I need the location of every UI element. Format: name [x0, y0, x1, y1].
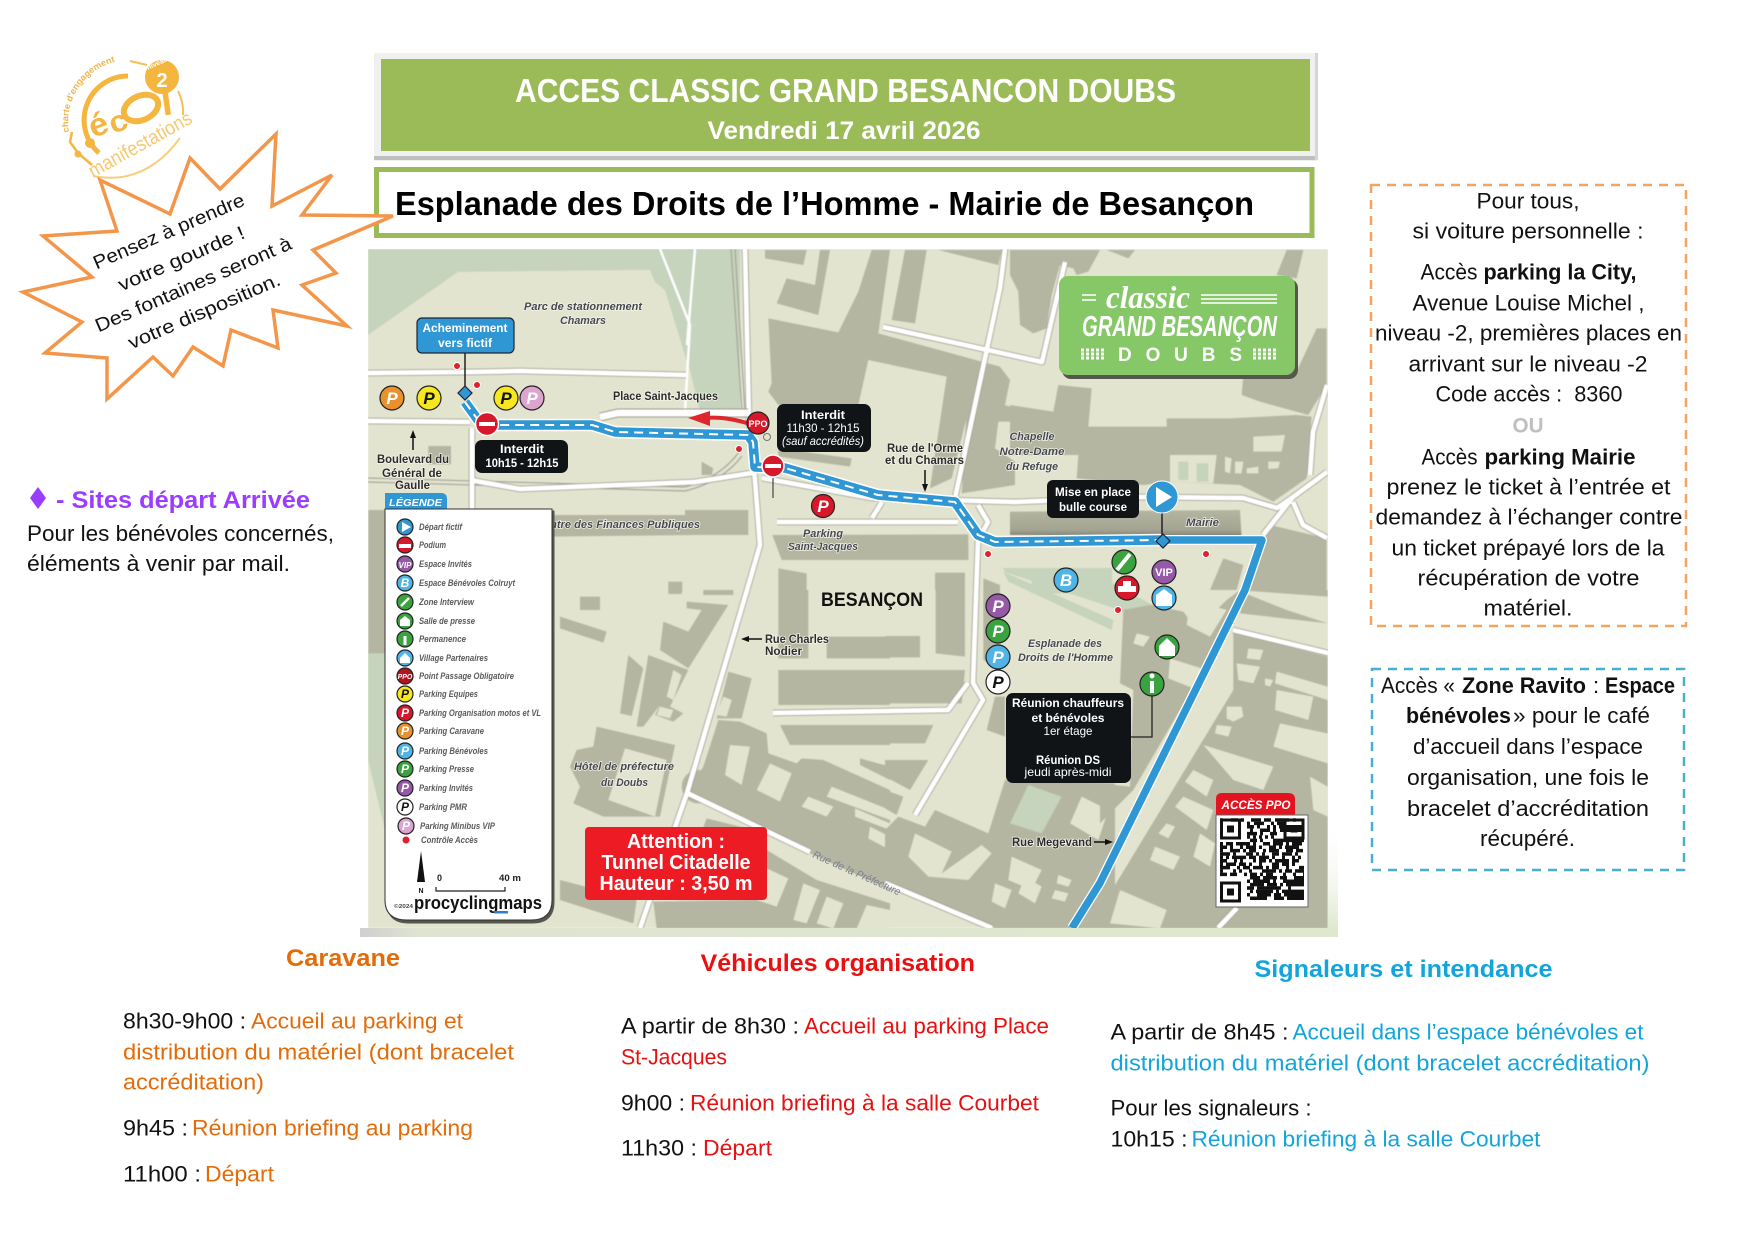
panel: car access: Pour tous,: [1476, 188, 1580, 214]
legend panel: Podium: [419, 540, 446, 551]
panel: caravane schedule: Caravane: [286, 945, 400, 972]
map labels: Parking: [803, 528, 843, 540]
panel: signaleurs schedule: Signaleurs et intendance: [1254, 956, 1552, 983]
attention callout: Tunnel Citadelle: [602, 852, 750, 874]
map labels: Gaulle: [395, 478, 430, 492]
attention callout: Attention :: [627, 831, 725, 853]
legend panel: P: [401, 762, 410, 776]
map panel: [360, 249, 1338, 937]
legend panel: ©2024: [394, 903, 413, 910]
panel: caravane schedule: distribution du matériel (dont bracelet: [123, 1040, 514, 1064]
interdit label 1: 10h15 - 12h15: [486, 456, 559, 470]
panel: ravito access: d’accueil dans l’espace: [1413, 734, 1643, 759]
panel: ravito access: bénévoles: [1406, 703, 1511, 728]
location heading: [376, 170, 1312, 236]
panel: caravane schedule: [123, 945, 514, 1186]
eco-manifestations logo: c: [104, 103, 132, 141]
panel: car access: niveau -2, premières places en: [1375, 320, 1682, 346]
panel: ravito access: Accès «: [1381, 673, 1455, 698]
title banner: [374, 53, 1318, 161]
panel: signaleurs schedule: Accueil dans l’espace bénévoles et: [1292, 1020, 1644, 1044]
starburst callout: Des fontaines seront à: [92, 233, 295, 337]
blue acheminement label: [417, 318, 514, 400]
panel: caravane schedule: 8h30-9h00 :: [123, 1008, 246, 1034]
map panel: P: [992, 673, 1004, 692]
map panel: P: [526, 389, 538, 408]
map labels: [377, 301, 1219, 898]
panel: ravito access: organisation, une fois le: [1407, 765, 1649, 790]
map labels: Général de: [382, 466, 442, 480]
panel: car access: Code accès : 8360: [1436, 382, 1622, 406]
access control dots: [454, 362, 1210, 614]
legend panel: 40 m: [499, 873, 521, 883]
reunion label: [1006, 693, 1152, 783]
map labels: Rue Megevand: [1012, 835, 1092, 849]
map panel: VIP: [1155, 567, 1173, 579]
legend panel: 0: [437, 873, 442, 883]
map markers: [380, 386, 1179, 696]
map labels: BESANÇON: [821, 590, 923, 611]
map labels: Notre-Dame: [1000, 446, 1064, 458]
classic logo plate: GRAND BESANÇON: [1082, 311, 1278, 343]
legend panel: P: [401, 706, 410, 720]
interdit label 2: 11h30 - 12h15: [786, 421, 860, 435]
legend panel: Zone Interview: [418, 597, 475, 608]
panel: car access: si voiture personnelle :: [1412, 218, 1644, 244]
map labels: Chapelle: [1010, 431, 1054, 443]
map panel: PPO: [748, 419, 768, 429]
legend panel: Parking Presse: [419, 764, 475, 775]
map labels: Nodier: [765, 644, 802, 658]
legend panel: Parking Bénévoles: [419, 746, 488, 757]
sites note: [27, 487, 334, 576]
map panel: P: [817, 497, 829, 516]
legend panel: P: [401, 687, 410, 701]
park and green areas: [368, 249, 1180, 833]
map labels: Rue de la Préfecture: [811, 849, 903, 898]
no-entry signs: [476, 412, 784, 498]
panel: car access: demandez à l’échanger contre: [1376, 504, 1682, 530]
buildings south centre: [885, 545, 1115, 928]
legend panel: B: [401, 576, 410, 590]
title banner: Vendredi 17 avril 2026: [708, 117, 980, 145]
panel: car access: Avenue Louise Michel ,: [1412, 290, 1644, 316]
panel: vehicules schedule: Départ: [703, 1136, 772, 1160]
panel: ravito access: :: [1593, 673, 1599, 698]
map panel: P: [992, 622, 1004, 641]
buildings east: [1100, 590, 1328, 928]
blue acheminement label: vers fictif: [438, 336, 493, 350]
legend panel: P: [401, 781, 410, 795]
rail lines: [368, 249, 745, 491]
legend panel: LÉGENDE: [389, 496, 443, 509]
panel: car access: arrivant sur le niveau -2: [1408, 352, 1648, 376]
eco-manifestations logo: [62, 56, 196, 182]
panel: vehicules schedule: 11h30 :: [621, 1136, 697, 1160]
panel: vehicules schedule: Accueil au parking Place: [804, 1014, 1049, 1038]
panel: vehicules schedule: A partir de 8h30 :: [621, 1014, 799, 1038]
reunion label: Réunion DS: [1036, 753, 1100, 767]
map panel: P: [386, 389, 398, 408]
legend panel: P: [401, 724, 410, 738]
map labels: Mairie: [1186, 517, 1219, 529]
roads: [368, 249, 1328, 928]
eco-manifestations logo: 2: [156, 70, 168, 92]
legend panel: Parking PMR: [419, 802, 467, 813]
panel: vehicules schedule: Véhicules organisation: [700, 950, 975, 977]
panel: ravito access: » pour le café: [1513, 703, 1650, 728]
map panel: P: [992, 648, 1004, 667]
map labels: Chamars: [560, 315, 606, 327]
panel: caravane schedule: Accueil au parking et: [251, 1008, 463, 1034]
map labels: Rue de l'Orme: [887, 441, 963, 455]
start marker and mise en place label: Mise en place: [1055, 485, 1131, 499]
legend panel: N: [418, 888, 424, 895]
panel: signaleurs schedule: distribution du matériel (dont bracelet accréditation): [1110, 1050, 1650, 1076]
map labels: Place Saint-Jacques: [613, 389, 718, 403]
map labels: Saint-Jacques: [788, 541, 858, 553]
map labels: Parc de stationnement: [524, 301, 643, 313]
title banner: ACCES CLASSIC GRAND BESANCON DOUBS: [515, 72, 1176, 109]
classic logo plate: DOUBS: [1118, 345, 1242, 366]
map panel: B: [1060, 571, 1072, 590]
QR code: [1216, 793, 1308, 907]
interdit label 2: [777, 404, 871, 452]
panel: ravito access: Zone Ravito: [1462, 673, 1586, 698]
sites note: éléments à venir par mail.: [27, 551, 290, 576]
legend panel: P: [402, 819, 411, 833]
legend panel: Parking Equipes: [419, 689, 478, 700]
map labels: Esplanade des: [1028, 638, 1102, 650]
panel: vehicules schedule: 9h00 :: [621, 1090, 685, 1116]
map labels: Boulevard du: [377, 452, 449, 466]
panel: car access: Accès: [1422, 444, 1478, 470]
beige parking: [655, 282, 686, 358]
map labels: Rue Charles: [765, 632, 829, 646]
legend panel: Espace Bénévoles Colruyt: [419, 578, 516, 589]
legend panel: Parking Minibus VIP: [420, 821, 496, 832]
panel: signaleurs schedule: A partir de 8h45 :: [1110, 1020, 1288, 1044]
panel: car access: parking la City,: [1484, 260, 1636, 284]
map labels: et du Chamars: [885, 453, 964, 467]
starburst callout: Pensez à prendre: [90, 190, 248, 274]
eco-manifestations logo: manifestations: [85, 107, 196, 182]
reunion label: jeudi après-midi: [1023, 765, 1112, 779]
buildings south west: [560, 590, 890, 928]
panel: caravane schedule: Réunion briefing au parking: [192, 1116, 473, 1140]
location heading: Esplanade des Droits de l’Homme - Mairie de Besançon: [395, 185, 1254, 222]
starburst callout: votre gourde !: [115, 223, 248, 296]
panel: car access: parking Mairie: [1484, 444, 1636, 470]
legend panel: P: [401, 800, 410, 814]
panel: car access: Accès: [1420, 260, 1478, 284]
panel: ravito access: bracelet d’accréditation: [1407, 796, 1649, 821]
classic logo plate: classic: [1106, 279, 1190, 315]
map panel: P: [992, 597, 1004, 616]
legend panel: P: [401, 744, 410, 758]
reunion label: 1er étage: [1044, 724, 1093, 738]
starburst callout: votre disposition.: [125, 270, 284, 354]
panel: car access: matériel.: [1484, 596, 1572, 620]
panel: vehicules schedule: St-Jacques: [621, 1044, 727, 1070]
start marker and mise en place label: [1047, 480, 1178, 548]
map labels: du Doubs: [601, 777, 648, 789]
legend panel: [385, 493, 554, 924]
panel: signaleurs schedule: Réunion briefing à la salle Courbet: [1192, 1126, 1540, 1152]
panel: ravito access: Espace: [1605, 673, 1675, 698]
buildings north: [685, 250, 1015, 590]
panel: car access: un ticket prépayé lors de la: [1392, 536, 1665, 560]
interdit label 1: [475, 440, 568, 473]
QR code: ACCÈS PPO: [1220, 799, 1291, 812]
eco-manifestations logo: niveau: [146, 56, 169, 72]
panel: signaleurs schedule: 10h15 :: [1110, 1126, 1188, 1152]
sites note: Pour les bénévoles concernés,: [27, 521, 334, 546]
map labels: Centre des Finances Publiques: [536, 519, 700, 531]
panel: caravane schedule: 9h45 :: [123, 1116, 188, 1140]
panel: ravito access: [1372, 669, 1684, 870]
red arrow: [688, 411, 750, 426]
start marker and mise en place label: bulle course: [1059, 500, 1127, 514]
legend panel: Permanence: [419, 634, 467, 645]
panel: car access: prenez le ticket à l’entrée et: [1386, 474, 1670, 500]
route: [465, 402, 1262, 928]
starburst callout: [23, 134, 393, 399]
map labels: du Refuge: [1006, 461, 1058, 473]
interdit label 1: Interdit: [500, 442, 544, 456]
panel: car access: récupération de votre: [1418, 566, 1640, 590]
panel: caravane schedule: Départ: [205, 1162, 274, 1186]
sites note: - Sites départ Arrivée: [56, 487, 310, 514]
panel: caravane schedule: 11h00 :: [123, 1162, 201, 1186]
map panel: P: [423, 389, 435, 408]
legend panel: PPO: [398, 674, 413, 681]
blue acheminement label: Acheminement: [422, 321, 508, 335]
panel: ravito access: récupéré.: [1480, 826, 1575, 851]
legend panel: Parking Invités: [419, 783, 473, 794]
legend panel: Parking Caravane: [419, 726, 485, 737]
panel: car access: OU: [1512, 414, 1544, 438]
classic logo plate: [1059, 276, 1298, 379]
panel: vehicules schedule: Réunion briefing à la salle Courbet: [690, 1090, 1039, 1116]
panel: caravane schedule: accréditation): [123, 1070, 264, 1094]
attention callout: Hauteur : 3,50 m: [600, 873, 752, 895]
legend panel: Parking Organisation motos et VL: [419, 708, 541, 719]
legend panel: VIP: [399, 561, 412, 570]
map labels: Hôtel de préfecture: [574, 761, 674, 773]
legend panel: Contrôle Accès: [421, 835, 478, 846]
legend panel: Départ fictif: [419, 522, 463, 533]
interdit label 2: (sauf accrédités): [782, 434, 864, 448]
reunion label: Réunion chauffeurs: [1012, 696, 1124, 710]
panel: signaleurs schedule: [1110, 956, 1650, 1152]
panel: signaleurs schedule: Pour les signaleurs :: [1110, 1096, 1312, 1120]
legend panel: Salle de presse: [419, 616, 476, 627]
eco-manifestations logo: é: [83, 104, 113, 145]
eco-manifestations logo: charte d'engagement: [62, 56, 115, 132]
legend panel: Espace Invités: [419, 559, 472, 570]
panel: vehicules schedule: [621, 950, 1049, 1160]
interdit label 2: Interdit: [801, 408, 845, 422]
legend panel: procyclingmaps: [414, 893, 542, 913]
map labels: Droits de l'Homme: [1018, 652, 1113, 664]
panel: car access: [1371, 185, 1686, 626]
legend panel: Point Passage Obligatoire: [419, 671, 515, 682]
reunion label: et bénévoles: [1032, 711, 1105, 725]
legend panel: Village Partenaires: [419, 653, 488, 664]
map panel: P: [500, 389, 512, 408]
attention callout: [585, 827, 767, 900]
